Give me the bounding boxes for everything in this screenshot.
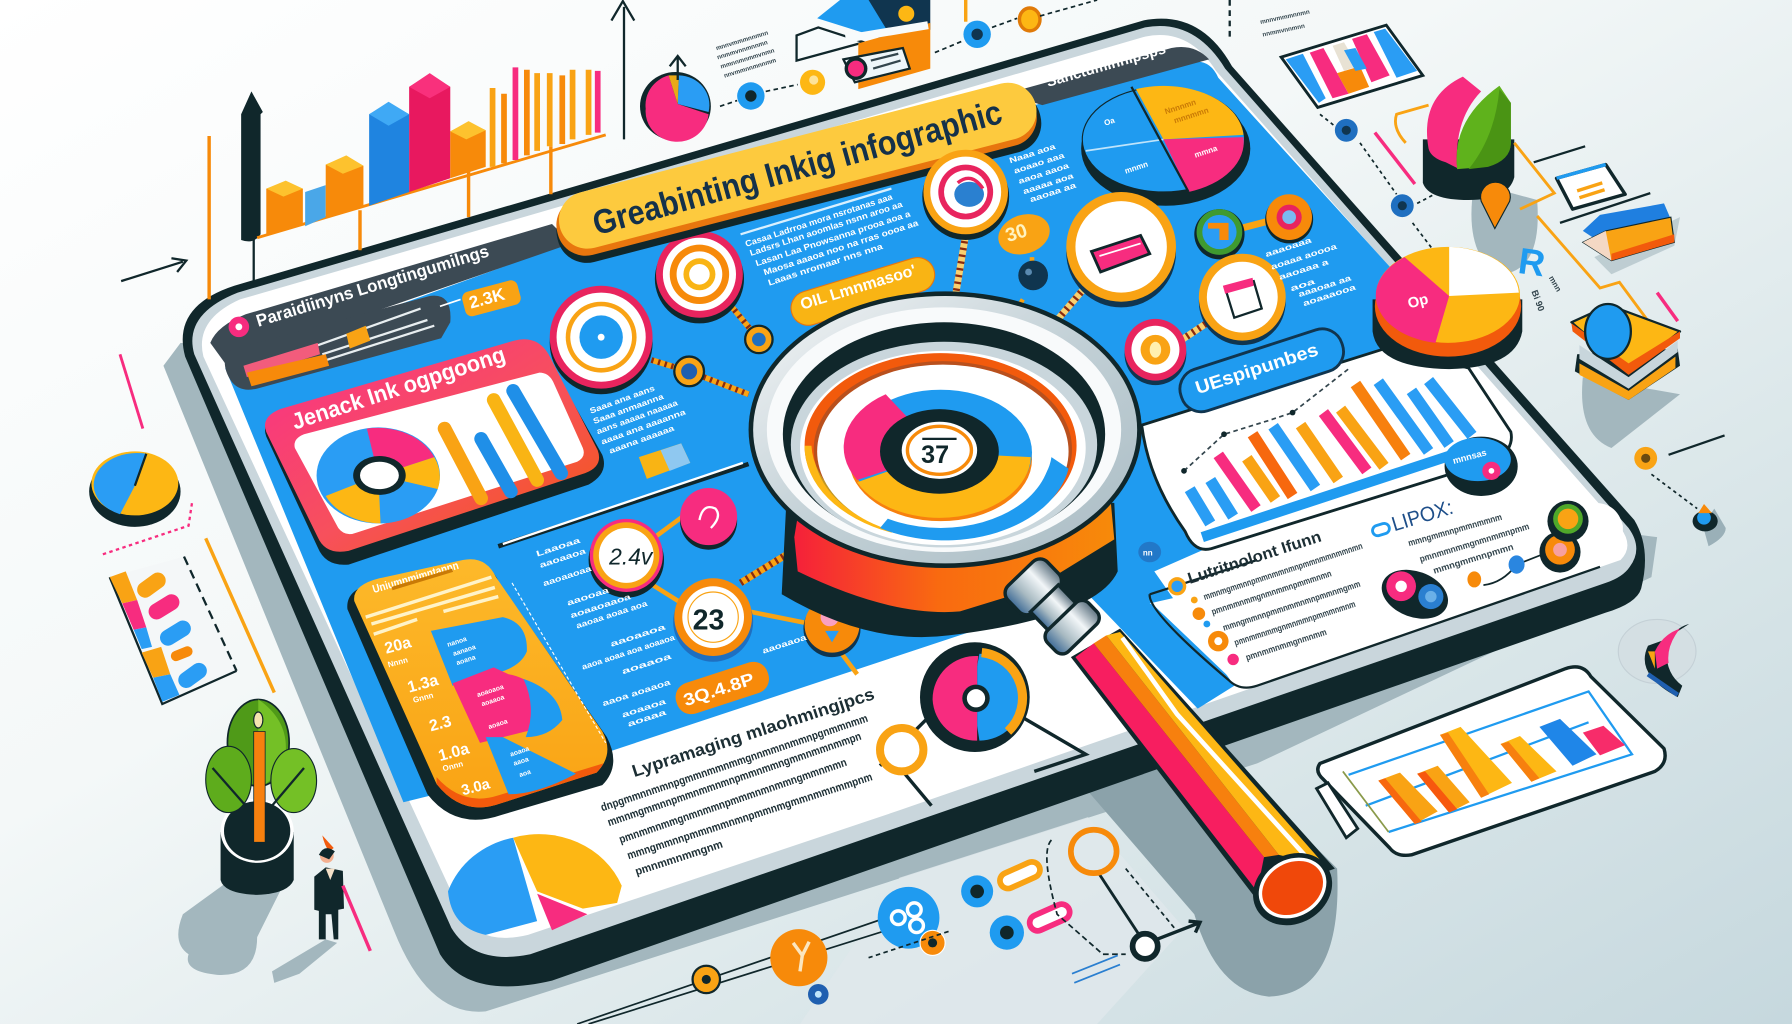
lower article text: pmnmmnmmgnmnmmnpmmmnmnmmngmmnmmn <box>618 757 848 846</box>
drum base <box>782 503 1118 637</box>
top dots and text: nnmmvnnmnnmn <box>716 39 769 61</box>
text block right <box>1264 235 1358 308</box>
text blocks mid: aaoaaoa <box>609 622 667 649</box>
card shapes <box>431 617 527 686</box>
text block near pie: Naaa aoa <box>1008 142 1057 165</box>
text blocks mid: aaoaaoaa <box>542 564 593 588</box>
card numbers: 1.0a <box>437 740 471 765</box>
shadows <box>163 183 1680 1012</box>
top right connector dots <box>935 0 1230 53</box>
bars <box>1378 773 1438 824</box>
text block under target: Saaa anmaanna <box>592 392 665 426</box>
text blocks mid: aoaaoa <box>621 651 673 676</box>
lens donut <box>844 390 1032 521</box>
connected nodes <box>1483 552 1549 585</box>
blue pie right top: Oa <box>1103 116 1116 128</box>
donut connector bottom <box>880 642 1086 806</box>
top dots and text: nnvmmnnmnnmm <box>723 57 777 80</box>
text blocks mid: aaoa aoaa aoa aoaaoa <box>581 633 676 672</box>
orange value pill: 3Q.4.8P <box>681 668 757 710</box>
tablet screen <box>202 35 1627 938</box>
text block top middle: Laaas nromaar nns nna <box>767 241 884 288</box>
node 2.4v: 2.4v <box>608 544 654 570</box>
text blocks mid <box>535 536 808 729</box>
card numbers: Gnnn <box>412 691 435 705</box>
top circle with link <box>922 150 1009 303</box>
lower article text: pmnmmnmmgnm <box>634 839 724 878</box>
small card icon right <box>1557 165 1625 209</box>
card numbers <box>383 634 493 799</box>
bubble targets with connectors <box>550 231 773 394</box>
yellow card: aoaoa <box>488 718 509 731</box>
node 23 <box>673 578 753 662</box>
Lipox card: mmngmmnnpmmn <box>1432 542 1515 576</box>
dark legend pill <box>225 296 450 390</box>
plant <box>206 699 317 895</box>
text blocks mid: aaoa aoaaoa <box>601 677 672 708</box>
lower article text: dnpgmmnnmmnpgmmnmmnmmgnnmmnnmmnpgnmmnmm <box>599 713 870 814</box>
article heading: Lypramaging mlaohmingjpcs <box>629 684 877 781</box>
card title: Uniumnmimntannn <box>371 560 460 596</box>
text block under target: aans aaaaa naaaaa <box>595 398 680 436</box>
chart badge <box>1445 437 1518 496</box>
text block near pie: aaoaa aa <box>1029 181 1078 204</box>
lower donut chart <box>920 642 1030 752</box>
orange pill text: OIL Lmnmasoo' <box>798 262 918 314</box>
text block right: aoa <box>1289 277 1317 293</box>
text block near pie: aaaaa aoa <box>1022 171 1075 196</box>
mini pie chart <box>640 56 711 142</box>
double circle <box>1375 561 1455 627</box>
left accents <box>103 354 274 693</box>
blue pie right top: mnnmmn <box>1173 106 1210 125</box>
Lipox card: pmnmmnmmgnmnmmnpmmmnmn <box>1210 568 1333 617</box>
Lipox card: pmnmmnmmgnmnmmnpmm <box>1418 521 1530 564</box>
magnifying glass <box>749 291 1142 637</box>
text blocks mid: aoaaoa <box>621 697 668 720</box>
small blue badge <box>1138 542 1161 562</box>
blue pie right top: mnmn <box>1124 160 1149 176</box>
30 tag and small node <box>993 208 1055 309</box>
tablet body <box>183 19 1645 986</box>
big pie right: Op <box>1406 292 1430 312</box>
Lipox card: mmnmgmmnnpmmnmmnmnpmmnmmnmmnmn <box>1202 541 1364 602</box>
yellow card: aoaaoa <box>481 694 506 708</box>
text blocks mid: aaoaa aoaa aoa <box>575 599 649 630</box>
node 23: 23 <box>693 605 724 637</box>
node orange <box>803 598 861 657</box>
Lipox card: pmnmmnmmgnmnmm <box>1244 627 1328 662</box>
pink card <box>265 339 604 565</box>
text block under target: Saaa ana aans <box>588 383 657 416</box>
blue pill label: UEspipunbes <box>1192 339 1321 398</box>
screen bars on left <box>225 296 450 390</box>
text block top middle: Maosa aaaoa noo na rras oooa aa <box>762 218 920 277</box>
Lipox heading: LIPOX: <box>1389 496 1456 536</box>
tablet frame <box>192 26 1636 957</box>
yellow card: aoaoaoa <box>476 684 505 699</box>
orange pill text <box>787 253 939 330</box>
top dots and text: mnnvmmmnnmnn <box>715 30 769 52</box>
card heading: Lutritnolont Ifunn <box>1186 529 1324 588</box>
yellow card: aoaoa <box>509 746 530 758</box>
text block top middle: Lasan Laa Pnowsanna prooa aoa a <box>754 208 912 268</box>
text block right: aaoaaa a <box>1278 257 1330 282</box>
light diagram panel <box>800 817 1184 1024</box>
header text left: Paraidiinyns Longtingumilngs <box>254 241 491 331</box>
ticket icon <box>639 443 690 479</box>
stacked icon <box>1571 304 1680 400</box>
bottom chain <box>577 887 945 1024</box>
card numbers: 3.0a <box>460 776 493 799</box>
R label icon: Bi 90 <box>1530 289 1546 313</box>
target 2 <box>655 231 744 323</box>
yellow card <box>347 559 613 820</box>
card numbers: 20a <box>383 634 413 658</box>
R label icon <box>1516 240 1563 313</box>
Lipox card <box>1150 496 1623 688</box>
grid card top right: mnnvmmmnnmn <box>1260 9 1311 26</box>
text block right: aoaaa aoooa <box>1270 242 1339 272</box>
bottom diagram panel <box>869 830 1200 983</box>
blue pill label <box>1175 324 1349 417</box>
text block top middle: Casaa Ladrroa mora nsrotanas aaa <box>744 191 894 249</box>
small nodes right <box>1194 194 1313 269</box>
card numbers: 2.3 <box>427 713 453 735</box>
node pink <box>680 488 737 550</box>
right bottom dot and pin <box>1634 435 1726 546</box>
text block under target: aaana aaaaaa <box>608 423 676 456</box>
left pie icon <box>89 451 181 527</box>
magnifier handle <box>1000 554 1345 939</box>
text blocks mid: aoaaa <box>626 708 668 729</box>
R label icon: mnn <box>1547 274 1563 293</box>
house circle <box>1177 254 1286 345</box>
text blocks mid: aoaaoaaoa <box>569 592 633 620</box>
text block top middle <box>741 189 920 288</box>
big pie right <box>1373 247 1522 369</box>
right circle with card <box>1057 192 1176 320</box>
rim <box>749 291 1142 568</box>
chart card right <box>1142 347 1518 549</box>
blue screen area <box>225 62 1486 802</box>
inner lens <box>783 322 1105 546</box>
person <box>314 835 370 951</box>
card numbers: Nnnn <box>387 655 409 669</box>
chart badge: mnnsas <box>1452 447 1488 466</box>
connector dots right <box>1335 119 1414 217</box>
grid card top right <box>1260 9 1423 107</box>
blue pie right top: mmna <box>1193 144 1219 160</box>
arrow left <box>121 258 186 281</box>
background bar chart top left <box>209 67 606 299</box>
top dots and text <box>715 30 825 110</box>
card numbers: Onnn <box>442 759 464 773</box>
top dots and text: mmnnmnmmvnmn <box>720 47 775 70</box>
text block under target <box>588 383 687 456</box>
slanted bars <box>445 391 561 498</box>
30 tag and small node: 30 <box>1003 219 1030 247</box>
left list card <box>110 557 237 704</box>
text block under target: aaaa ana aaaanna <box>600 407 687 446</box>
bullets <box>1168 577 1186 595</box>
pencils icon <box>1583 203 1674 261</box>
text blocks mid: aaoaaoa <box>761 633 808 656</box>
connector lines right <box>1320 105 1678 339</box>
text blocks mid: Laaoaa <box>535 536 582 558</box>
lower article text: mmnmgmmnnpmmnmmnmnpmmnmmngmmnmmnmmpn <box>606 731 863 829</box>
text block near pie: aaoa aaoa <box>1017 161 1071 186</box>
node 2.4v <box>589 519 664 598</box>
lower article text <box>599 684 877 878</box>
title pill <box>550 77 1048 269</box>
value tag 2.3K <box>440 279 522 318</box>
header text right: Sanctuminnipsps <box>1045 41 1168 91</box>
small coin circle <box>1125 319 1186 385</box>
text blocks mid: aaoaaoa <box>538 546 588 570</box>
text block right: aoaaaooa <box>1302 282 1358 308</box>
cup with pink and green shape <box>1423 77 1514 200</box>
lower article text: mmngmmnnpmmnmmnmnpmmnmgmmnmmnmmpnm <box>626 771 874 862</box>
bar chart card lower right <box>1317 667 1665 855</box>
divider highlight <box>503 463 743 544</box>
value tag 2.3K: 2.3K <box>467 284 507 312</box>
yellow card: aaoa <box>513 756 530 768</box>
dashed up arrow <box>611 1 634 139</box>
text block near pie: aoaao aaa <box>1013 151 1066 176</box>
orange value pill <box>672 658 773 718</box>
text blocks mid: aaooaa <box>566 585 611 608</box>
R label icon: R <box>1516 240 1548 284</box>
right small ornament <box>1618 619 1696 697</box>
mid left nodes <box>589 488 861 674</box>
handle cap <box>1240 839 1345 939</box>
divider line <box>498 464 749 546</box>
Lipox card: mmngmmnnpmmnmmnm <box>1407 512 1503 548</box>
pink card title: Jenack Ink ogpgoong <box>288 341 508 434</box>
yellow card: aoa <box>518 769 532 779</box>
small blue badge: nn <box>1143 548 1153 557</box>
map pin <box>1481 182 1510 229</box>
blue pie right top: Nnnnmn <box>1164 98 1197 116</box>
lens number: 37 <box>921 441 949 469</box>
Lipox card: mmngmmnnpmmnmmnmnpmmnmgmm <box>1222 579 1362 633</box>
donut chart <box>317 427 440 523</box>
text block near pie <box>1008 142 1078 204</box>
yellow card: aanaoa <box>452 644 477 658</box>
header band <box>210 41 1209 363</box>
text block top middle: Ladsrs Lhan aoomlas nsnn aroo aa <box>748 199 904 258</box>
title text: Greabinting Inkig infographic <box>589 94 1006 243</box>
envelope icon <box>797 0 930 89</box>
card numbers: 1.3a <box>406 672 440 696</box>
yellow card: nanoa <box>446 636 468 649</box>
text block right: aaaoaa aa <box>1297 273 1353 299</box>
bottom left pie <box>448 834 622 935</box>
target 1 <box>550 286 653 394</box>
blue pie right top <box>1081 86 1250 206</box>
text block right: aaaoaaa <box>1264 235 1313 259</box>
ferrule <box>1000 554 1103 658</box>
grid card top right: nnmmvnnmnn <box>1262 23 1306 39</box>
Lipox card: pmnmmnmmgnmnmmnpmmmnmnm <box>1233 599 1357 648</box>
yellow card: aoana <box>456 654 477 667</box>
